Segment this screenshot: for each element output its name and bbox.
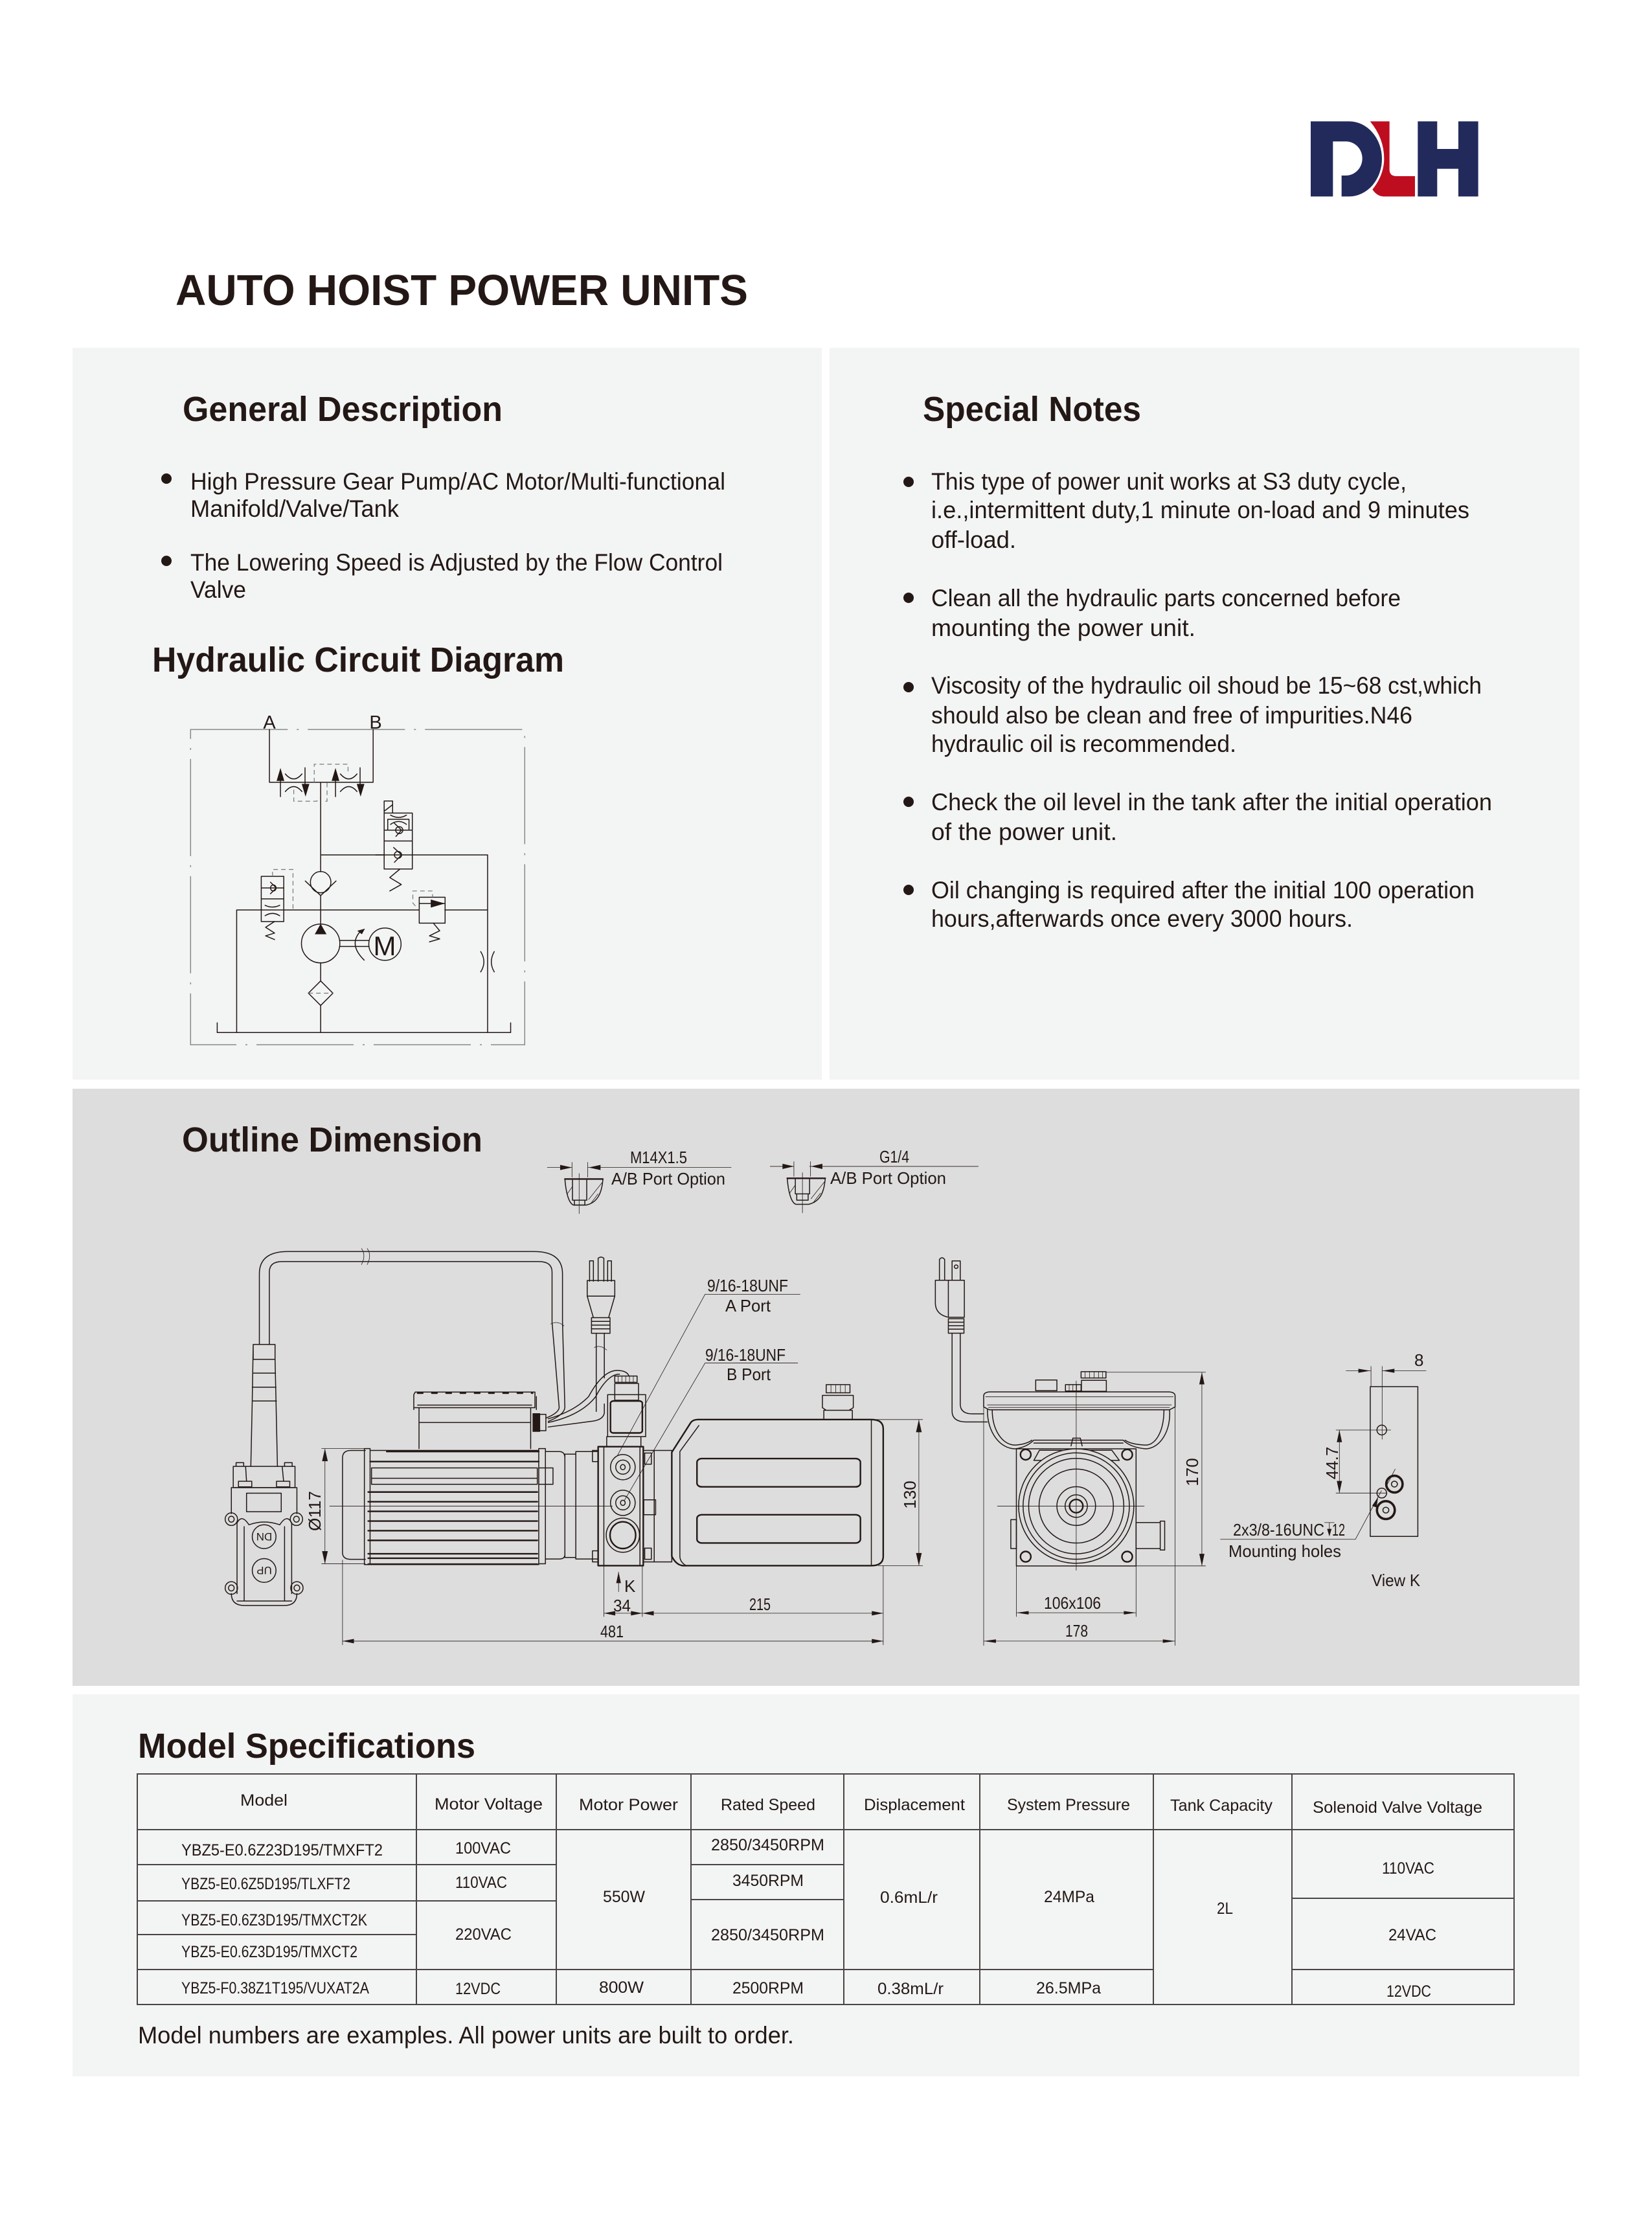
table body values: 2L: [1217, 1900, 1233, 1918]
title: AUTO HOIST POWER UNITS: [175, 266, 748, 315]
table body values: 0.38mL/r: [877, 1980, 944, 1998]
drawing: side view of power unit with pendant: 34: [613, 1596, 631, 1615]
table body values: 3450RPM: [732, 1872, 804, 1890]
table body values: 2500RPM: [732, 1979, 804, 1997]
table: model specifications: [137, 1774, 1514, 2005]
table body values: YBZ5-E0.6Z23D195/TMXFT2: [181, 1841, 383, 1859]
table body values: 2850/3450RPM: [711, 1836, 824, 1854]
table header row: Model: [240, 1791, 288, 1810]
table body values: 12VDC: [455, 1980, 501, 1998]
dimension lines: [322, 1420, 923, 1645]
panel: special notes background: [830, 348, 1579, 1080]
heading: hydraulic circuit diagram: Hydraulic Circuit Diagram: [152, 641, 564, 679]
drawing: side view of power unit with pendant: 9/16-18UNF: [705, 1345, 786, 1365]
heading: model specifications: Model Specifications: [138, 1727, 475, 1766]
table body values: 0.6mL/r: [880, 1889, 938, 1907]
drawing: side view of power unit with pendant: DN: [256, 1530, 272, 1543]
text block: general description bullets: [161, 468, 725, 603]
drawing: view K: 2x3/8-16UNC: [1233, 1520, 1324, 1539]
text block: general description bullets: High Pressure Gear Pump/AC Motor/Multi-functional: [190, 468, 725, 495]
table header row: [240, 1791, 1482, 1817]
table body values: YBZ5-E0.6Z5D195/TLXFT2: [181, 1875, 350, 1893]
table body values: YBZ5-E0.6Z3D195/TMXCT2K: [181, 1911, 367, 1929]
text block: general description bullets: Manifold/Valve/Tank: [190, 495, 399, 522]
table header row: Rated Speed: [721, 1796, 815, 1814]
text block: special notes bullets: mounting the power unit.: [931, 615, 1195, 641]
table header row: Motor Power: [579, 1796, 678, 1814]
text block: general description bullets: Valve: [190, 576, 246, 603]
motor junction box: [414, 1392, 536, 1449]
text block: special notes bullets: This type of power unit works at S3 duty cycle,: [931, 468, 1407, 495]
table body values: 12VDC: [1386, 1982, 1431, 2001]
motor body: [343, 1449, 598, 1565]
drawing: A/B port options: A/B Port Option: [611, 1169, 725, 1188]
panel: outline dimension background: [73, 1089, 1579, 1686]
drawing: side view of power unit with pendant: 9/16-18UNF: [707, 1276, 788, 1295]
text block: special notes bullets: hours,afterwards once every 3000 hours.: [931, 905, 1353, 932]
drawing: end view of power unit: 106x106: [1044, 1593, 1101, 1613]
drawing: view K: View K: [1372, 1571, 1421, 1590]
table body values: 100VAC: [455, 1839, 511, 1857]
table body values: 110VAC: [1382, 1859, 1434, 1878]
table header row: Motor Voltage: [435, 1795, 543, 1813]
valve block: [598, 1447, 643, 1565]
drawing: view K: 8: [1414, 1350, 1423, 1370]
table header row: Displacement: [864, 1796, 965, 1814]
drawing: view K: Mounting holes: [1228, 1541, 1341, 1561]
solenoid: [607, 1376, 646, 1447]
drawing: side view of power unit with pendant: 215: [749, 1595, 771, 1614]
table body values: YBZ5-F0.38Z1T195/VUXAT2A: [181, 1979, 369, 1997]
table body values: 110VAC: [455, 1874, 507, 1892]
text block: special notes bullets: Clean all the hydraulic parts concerned before: [931, 585, 1401, 611]
table body values: 550W: [603, 1888, 645, 1906]
tank: [672, 1420, 883, 1565]
text block: special notes bullets: of the power unit.: [931, 819, 1117, 845]
table header row: System Pressure: [1007, 1796, 1130, 1814]
drawing: side view of power unit with pendant: A Port: [725, 1296, 771, 1315]
text block: special notes bullets: Check the oil level in the tank after the initial operation: [931, 789, 1492, 815]
chart: hydraulic circuit diagram: B: [369, 712, 382, 733]
panel: model specifications background: [73, 1694, 1579, 2076]
heading: outline dimension: Outline Dimension: [182, 1120, 482, 1159]
table body values: 24MPa: [1044, 1888, 1094, 1906]
text block: special notes bullets: i.e.,intermittent duty,1 minute on-load and 9 minutes: [931, 497, 1469, 523]
chart: hydraulic circuit diagram: M: [373, 931, 396, 961]
drawing: A/B port options: M14X1.5: [630, 1148, 687, 1167]
drawing: A/B port options: G1/4: [879, 1147, 909, 1166]
table body values: 220VAC: [455, 1925, 512, 1944]
text block: special notes bullets: off-load.: [931, 527, 1016, 553]
drawing: side view of power unit with pendant: UP: [256, 1564, 272, 1576]
table body values: [181, 1836, 1436, 2001]
drawing: side view of power unit with pendant: B Port: [727, 1365, 771, 1384]
drawing: side view of power unit with pendant: [225, 1249, 923, 1645]
drawing: side view of power unit with pendant: 130: [900, 1481, 920, 1509]
logo: DLH: [1311, 121, 1478, 196]
drawing: end view of power unit: 170: [1182, 1458, 1202, 1486]
text block: special notes bullets: should also be clean and free of impurities.N46: [931, 702, 1412, 729]
panel: general description and circuit diagram background: [73, 348, 822, 1080]
text block: special notes bullets: Oil changing is required after the initial 100 operation: [931, 877, 1475, 903]
chart: hydraulic circuit diagram: [190, 712, 525, 1045]
table body values: 26.5MPa: [1036, 1979, 1101, 1997]
text block: special notes bullets: [903, 468, 1492, 932]
text block: special notes bullets: Viscosity of the hydraulic oil shoud be 15~68 cst,which: [931, 672, 1482, 699]
drawing: view K: 12: [1332, 1520, 1345, 1539]
table body values: 2850/3450RPM: [711, 1926, 824, 1944]
drawing: end view of power unit: 178: [1065, 1621, 1088, 1641]
pendant control: [251, 1345, 277, 1466]
drawing: A/B port options: [547, 1147, 979, 1214]
drawing: side view of power unit with pendant: Ø117: [305, 1491, 324, 1531]
table body values: YBZ5-E0.6Z3D195/TMXCT2: [181, 1943, 357, 1961]
drawing: view K: [1221, 1350, 1426, 1590]
drawing: view K: 44.7: [1322, 1447, 1342, 1479]
drawing: side view of power unit with pendant: 481: [600, 1622, 624, 1641]
note: model numbers: Model numbers are examples. All power units are built to order.: [138, 2022, 794, 2049]
heading: special notes: Special Notes: [923, 390, 1141, 429]
table header row: Solenoid Valve Voltage: [1313, 1799, 1482, 1817]
heading: general description: General Description: [183, 390, 503, 429]
table body values: 800W: [599, 1979, 644, 1997]
drawing: end view of power unit: [935, 1258, 1206, 1646]
text block: general description bullets: The Lowering Speed is Adjusted by the Flow Control: [190, 549, 723, 576]
chart: hydraulic circuit diagram: A: [263, 712, 276, 733]
text block: special notes bullets: hydraulic oil is recommended.: [931, 731, 1236, 757]
table header row: Tank Capacity: [1170, 1797, 1273, 1815]
table body values: 24VAC: [1388, 1926, 1436, 1944]
drawing: side view of power unit with pendant: K: [624, 1576, 636, 1596]
drawing: A/B port options: A/B Port Option: [830, 1168, 946, 1188]
